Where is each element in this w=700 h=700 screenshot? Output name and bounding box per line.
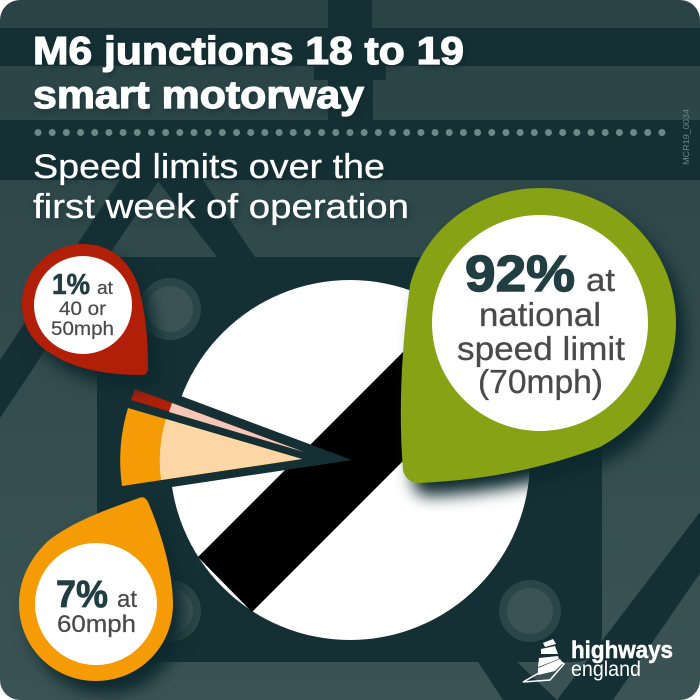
logo: highways england	[523, 637, 673, 682]
wedge: 1% at 40 or 50mph	[131, 389, 304, 452]
pin: 92%: national	[479, 296, 601, 333]
pin: 1%: 1%	[52, 269, 90, 301]
pin: 92%: at	[586, 262, 615, 298]
pie chart	[120, 280, 530, 640]
pin: 1%: at	[97, 278, 113, 298]
subtitle	[33, 148, 409, 226]
wedge: 7% at 60mph	[120, 408, 302, 486]
white disc with national speed limit band	[170, 280, 530, 640]
pin: 7%: at	[117, 586, 137, 613]
title: smart motorway	[33, 74, 364, 117]
road stud circles	[139, 278, 561, 642]
logo: highways england: highways	[571, 637, 673, 664]
title	[33, 30, 464, 117]
subtitle: first week of operation	[33, 188, 409, 226]
reference code: MCR19_0034	[682, 108, 691, 165]
subtitle: Speed limits over the	[33, 148, 385, 186]
pin: 1%: 40 or	[59, 299, 107, 320]
pin: 92%: (70mph)	[478, 363, 603, 400]
icon: road cone mark	[523, 639, 564, 682]
pin: 7%	[19, 497, 173, 681]
pin: 92%: speed limit	[457, 330, 625, 367]
pin: 1%: 50mph	[51, 319, 114, 340]
title: M6 junctions 18 to 19	[33, 30, 464, 73]
pin: 7%: 7%	[56, 574, 108, 616]
logo: highways england: england	[571, 658, 641, 681]
pin: 7%: 60mph	[57, 611, 136, 638]
pin: 92%	[401, 188, 676, 483]
pin: 92%: 92%	[465, 245, 575, 302]
pin: 1%	[22, 244, 148, 375]
